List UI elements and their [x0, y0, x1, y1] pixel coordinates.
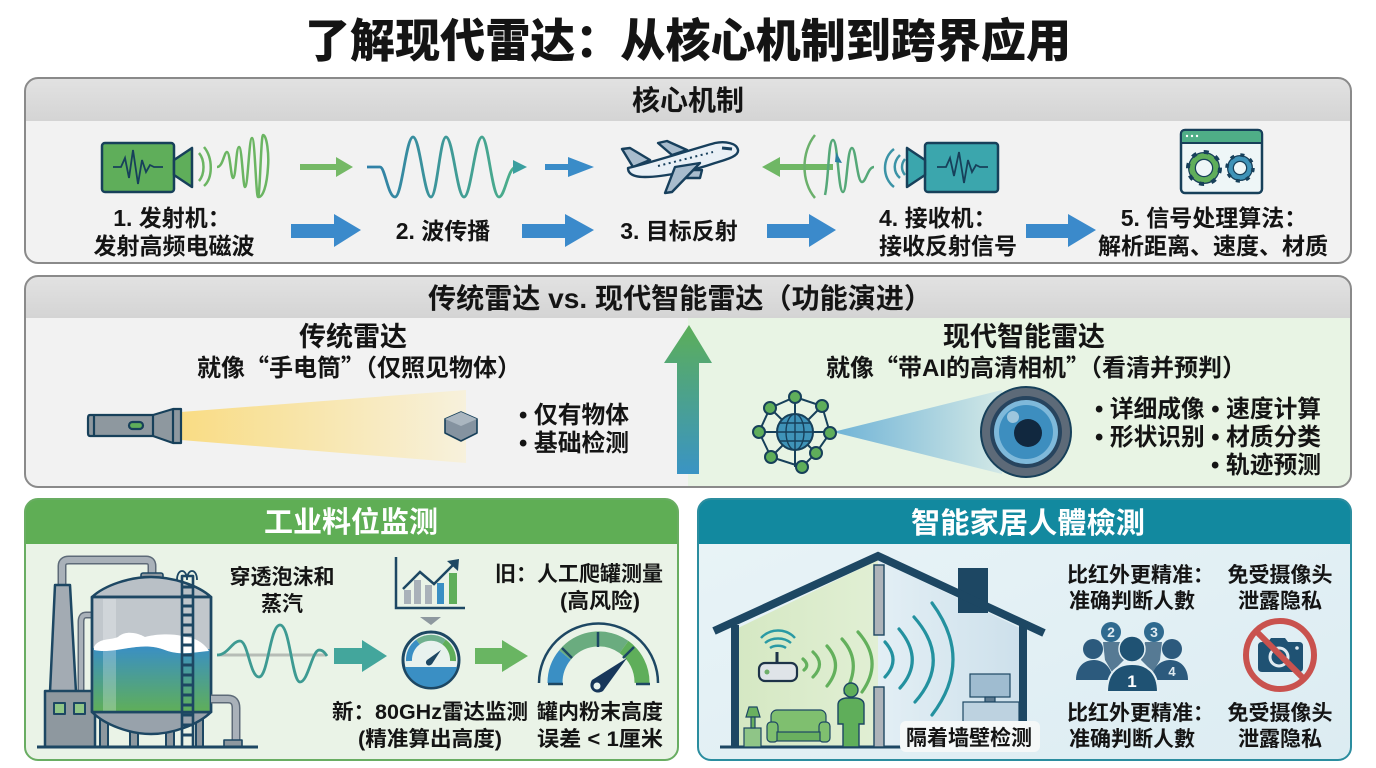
text: old method: 旧：人工爬罐测量 — [495, 563, 663, 586]
panel: smart home detection — [698, 499, 1351, 760]
icon: airplane — [622, 141, 738, 193]
text: more accurate top: 准确判断人數 — [1069, 590, 1195, 613]
label: step 3: 3. 目标反射 — [620, 218, 738, 244]
icon: teal signal arcs — [885, 603, 953, 715]
icon: people count: 1 — [1127, 672, 1137, 691]
label: step 1: 1. 发射机： — [113, 205, 231, 231]
icon: sofa — [767, 710, 830, 742]
icon: flashlight — [88, 409, 181, 443]
text: more accurate bottom: 比红外更精准： — [1067, 702, 1214, 725]
text: old method — [495, 563, 663, 613]
heading: core mechanism: 核心机制 — [632, 85, 744, 116]
callout: through wall: 隔着墙壁检测 — [906, 726, 1032, 750]
list: traditional features — [519, 402, 629, 457]
text: traditional analogy: 就像“手电筒”（仅照见物体） — [197, 348, 521, 383]
text: more accurate top — [1067, 564, 1214, 613]
label: step 4: 接收反射信号 — [879, 233, 1017, 259]
text: error margin: 罐内粉末高度 — [537, 700, 663, 724]
arrow: teal — [334, 640, 387, 672]
callout: through wall — [900, 721, 1040, 752]
icon: AI network — [753, 391, 836, 473]
icon: no camera — [1246, 621, 1314, 689]
chart: propagating wave — [367, 137, 527, 197]
icon: camera lens — [981, 387, 1071, 477]
icon: people count: 2 — [1107, 624, 1115, 640]
text: modern analogy: 就像“带AI的高清相机”（看清并预判） — [826, 348, 1246, 383]
text: more accurate bottom — [1067, 702, 1214, 751]
label: step 4: 4. 接收机： — [879, 205, 997, 231]
text: error margin: 误差 < 1厘米 — [537, 728, 663, 751]
panel: industrial level monitoring — [25, 499, 678, 760]
arrow: return green with wave — [762, 135, 874, 198]
label: step 1 — [94, 205, 254, 259]
icon: flashlight beam — [181, 390, 466, 463]
icon: gray pointer — [420, 617, 441, 625]
arrow: 2 to 3 — [522, 214, 594, 247]
icon: lamp — [744, 707, 761, 747]
title: 了解现代雷达：从核心机制到跨界应用 — [305, 15, 1071, 67]
icon: tv — [963, 674, 1019, 732]
label: step 5 — [1098, 205, 1328, 259]
arrow: green — [475, 640, 528, 672]
list: modern features: • 形状识别 • 材质分类 — [1095, 424, 1321, 451]
text: penetrates foam: 穿透泡沫和 — [230, 565, 334, 589]
heading: smart home: 智能家居人體檢測 — [911, 507, 1145, 540]
text: penetrates foam — [230, 565, 334, 616]
heading: comparison: 传统雷达 vs. 现代智能雷达（功能演进） — [428, 283, 932, 314]
text: new method: (精准算出高度) — [358, 727, 502, 751]
icon: router — [759, 630, 797, 681]
label: step 1: 发射高频电磁波 — [94, 233, 254, 259]
text: privacy bottom: 免受摄像头 — [1228, 702, 1332, 725]
text: privacy bottom — [1228, 702, 1332, 751]
icon: camera beam — [833, 390, 1002, 474]
heading: traditional radar: 传统雷达 — [299, 322, 407, 352]
icon: big gauge — [539, 624, 658, 693]
list: traditional features: • 仅有物体 — [519, 402, 629, 429]
icon: people count — [1076, 622, 1188, 692]
icon: people count: 3 — [1150, 624, 1158, 640]
icon: algorithm window — [1181, 130, 1262, 193]
list: traditional features: • 基础检测 — [519, 429, 629, 457]
text: old method: (高风险) — [560, 589, 640, 613]
text: more accurate bottom: 准确判断人數 — [1069, 728, 1195, 751]
arrow: 4 to 5 — [1026, 214, 1096, 247]
arrow: 1 to 2 — [291, 214, 361, 247]
text: more accurate top: 比红外更精准： — [1067, 564, 1214, 587]
list: modern features: • 详细成像 • 速度计算 — [1095, 396, 1321, 423]
chart: level wave — [217, 625, 327, 682]
icon: transmitter — [102, 135, 268, 197]
icon: green signal arcs — [803, 632, 872, 693]
icon: object cube — [445, 412, 477, 441]
heading: industrial: 工业料位监测 — [264, 506, 438, 539]
icon: bar line chart — [396, 557, 465, 608]
text: penetrates foam: 蒸汽 — [261, 593, 303, 616]
arrow: small green — [300, 157, 353, 177]
arrow: evolution — [664, 325, 712, 474]
icon: receiver — [885, 143, 998, 192]
heading: modern radar: 现代智能雷达 — [943, 322, 1105, 352]
text: privacy top — [1228, 564, 1332, 613]
list: modern features: • 轨迹预测 — [1211, 452, 1321, 479]
arrow: small blue — [545, 157, 594, 177]
label: step 2: 2. 波传播 — [396, 218, 490, 244]
text: privacy bottom: 泄露隐私 — [1238, 728, 1322, 751]
label: step 5: 5. 信号处理算法： — [1121, 205, 1307, 231]
icon: radar gauge — [403, 632, 459, 691]
text: error margin — [537, 700, 663, 751]
panel: traditional vs modern radar — [25, 276, 1351, 487]
panel: core mechanism — [25, 78, 1351, 263]
icon: house cutaway — [714, 556, 1044, 747]
list: modern features — [1095, 396, 1321, 479]
text: privacy top: 泄露隐私 — [1238, 590, 1322, 613]
label: step 5: 解析距离、速度、材质 — [1098, 233, 1328, 259]
arrow: 3 to 4 — [767, 214, 836, 247]
icon: tank and factory — [37, 560, 258, 747]
icon: people count: 4 — [1168, 664, 1176, 679]
icon: person — [838, 683, 864, 747]
label: step 4 — [879, 205, 1017, 259]
text: new method — [332, 700, 528, 751]
text: privacy top: 免受摄像头 — [1228, 564, 1332, 587]
text: new method: 新：80GHz雷达监测 — [332, 700, 528, 724]
